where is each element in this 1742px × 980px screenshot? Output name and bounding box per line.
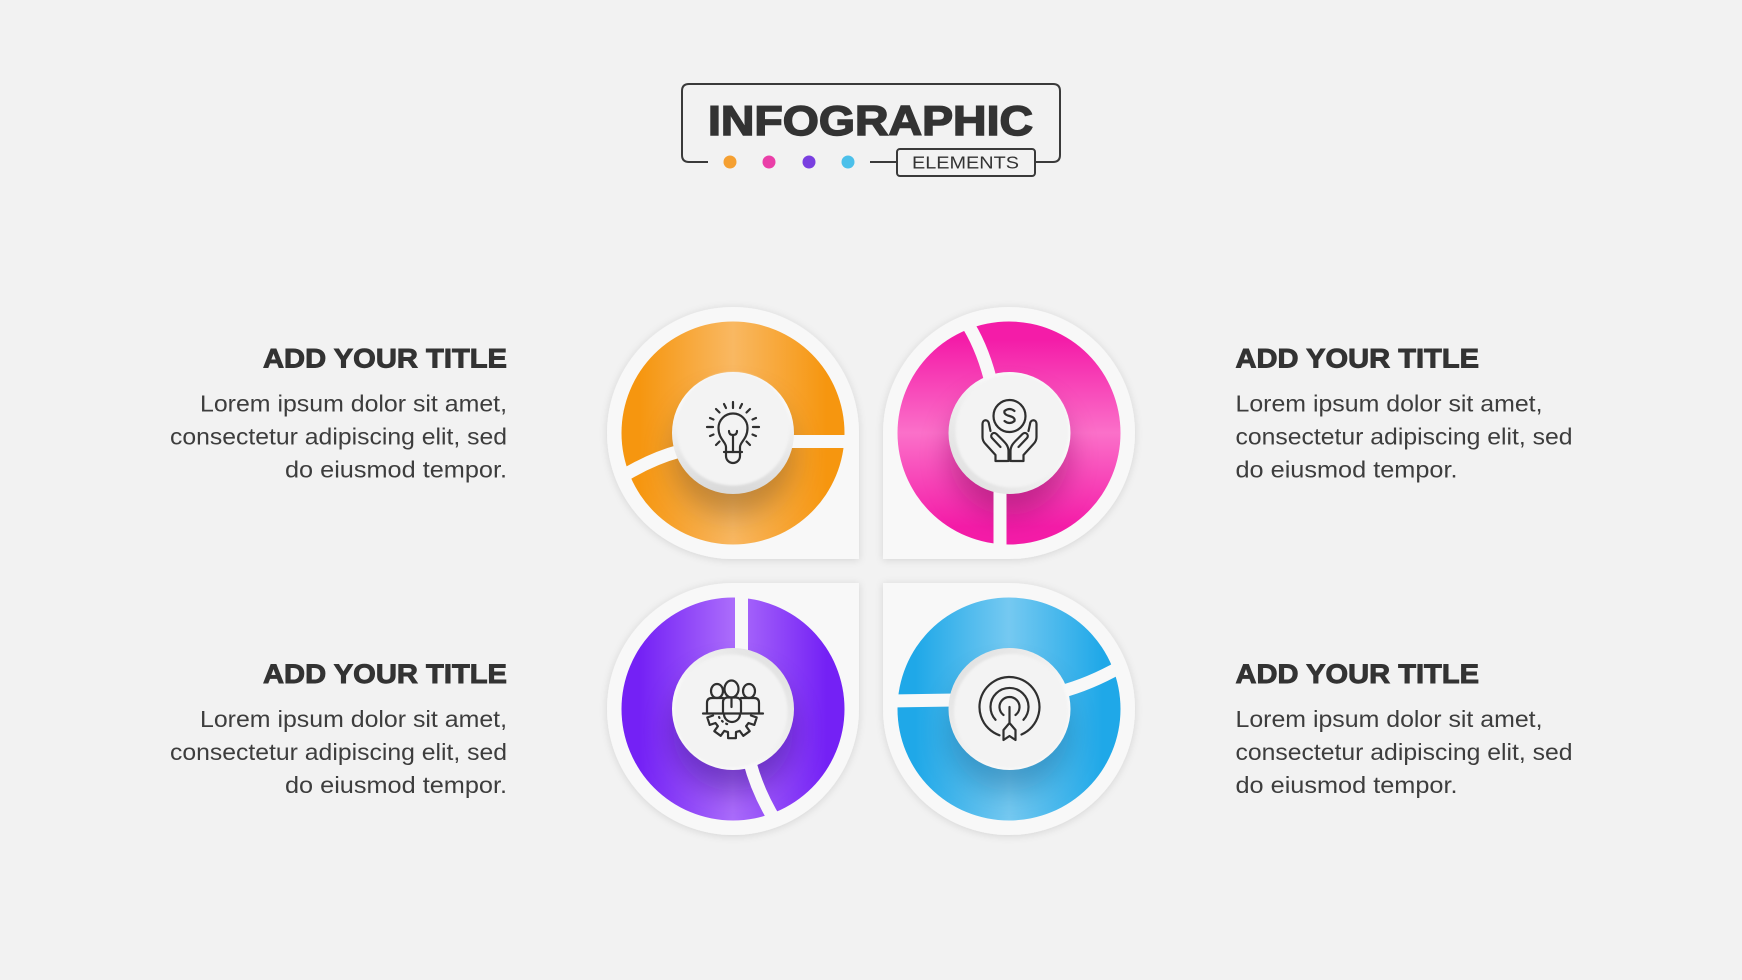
text block: bottom left: [170, 659, 507, 798]
text block: top right: do eiusmod tempor.: [1236, 456, 1458, 482]
text block: bottom right: ADD YOUR TITLE: [1236, 659, 1479, 689]
text block: bottom left: Lorem ipsum dolor sit amet,: [200, 706, 507, 732]
center disc: [948, 648, 1070, 770]
text block: bottom right: do eiusmod tempor.: [1236, 772, 1458, 798]
panel: blue step: [883, 583, 1135, 835]
text block: bottom right: Lorem ipsum dolor sit amet,: [1236, 706, 1542, 732]
text block: bottom left: do eiusmod tempor.: [285, 772, 507, 798]
text block: top left: do eiusmod tempor.: [285, 456, 507, 482]
text block: bottom left: ADD YOUR TITLE: [263, 659, 507, 689]
orange ring: [622, 322, 844, 544]
blue ring: [898, 598, 1120, 820]
subtitle: ELEMENTS: ELEMENTS: [912, 152, 1019, 172]
text block: top right: ADD YOUR TITLE: [1236, 344, 1479, 374]
text block: bottom left: consectetur adipiscing elit, sed: [170, 739, 507, 765]
text block: top right: [1236, 344, 1572, 482]
center disc: [672, 648, 794, 770]
text block: top left: [170, 344, 507, 482]
center disc: [672, 372, 794, 494]
text block: bottom right: consectetur adipiscing elit, sed: [1236, 739, 1572, 765]
icon: target with arrow: [979, 677, 1039, 740]
purple ring: [622, 598, 844, 820]
icon: team and gear: [703, 680, 763, 738]
icon: light bulb: [707, 402, 759, 463]
title frame: [682, 84, 1060, 162]
pink ring: [898, 322, 1120, 544]
panel: purple step: [607, 583, 859, 835]
title: INFOGRAPHIC: INFOGRAPHIC: [708, 97, 1033, 144]
text block: top left: ADD YOUR TITLE: [263, 344, 507, 374]
panel: orange step: [607, 307, 859, 559]
text block: top left: Lorem ipsum dolor sit amet,: [200, 390, 507, 416]
text block: bottom right: [1236, 659, 1572, 798]
center disc: [948, 372, 1070, 494]
subtitle: ELEMENTS: [897, 149, 1035, 176]
panel: pink step: [883, 307, 1135, 559]
header badge: [682, 84, 1060, 176]
icon: hands holding coin: [982, 400, 1036, 461]
text block: top right: Lorem ipsum dolor sit amet,: [1236, 390, 1542, 416]
text block: top right: consectetur adipiscing elit, sed: [1236, 424, 1572, 450]
colored dots: [724, 156, 854, 168]
text block: top left: consectetur adipiscing elit, sed: [170, 424, 507, 450]
